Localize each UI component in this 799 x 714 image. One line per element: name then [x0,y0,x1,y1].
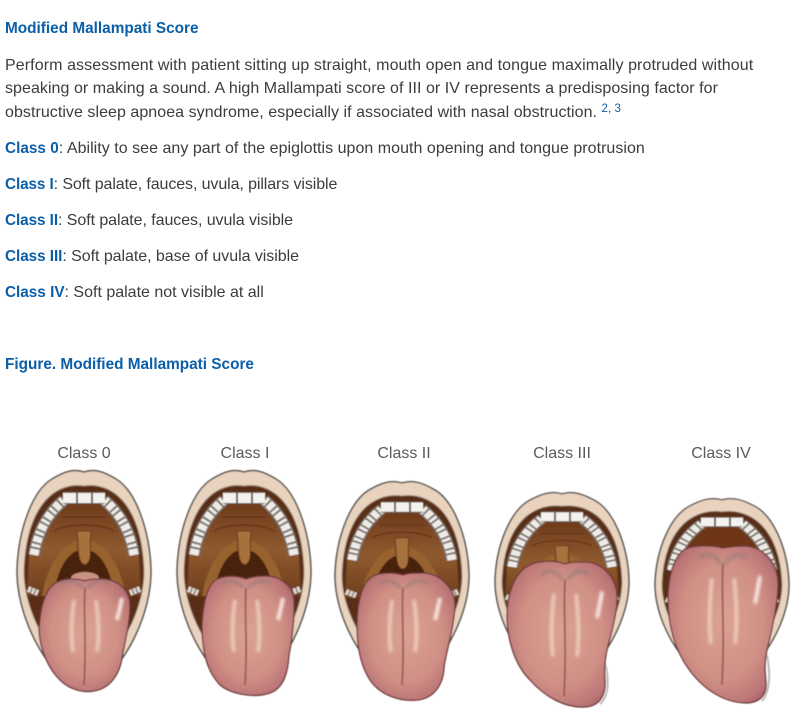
text: Class III definition: Class III: Soft palate, base of uvula visible [5,248,299,265]
heading: Modified Mallampati Score: Modified Mallampati Score [5,20,199,37]
label: Class I: Class I [221,445,269,462]
text: Class I definition: Class I: Soft palate, fauces, uvula, pillars visible [5,176,337,193]
mouth: Class 0 [17,471,151,692]
mouth: Class I [177,471,311,695]
text block: assessment instructions: Perform assessment with patient sitting up straight, mouth open and tongue maximally protruded without [5,57,753,74]
label: Class II: Class II [377,445,431,462]
mouth: Class IV [655,499,789,703]
text block: assessment instructions: speaking or making a sound. A high Mallampati score of III or IV represents a predisposing factor for [5,80,718,97]
label: Class 0: Class 0 [57,445,111,462]
mouth: Class II [335,482,469,700]
text block: assessment instructions: obstructive sleep apnoea syndrome, especially if associated with nasal obstruction. 2, 3 [5,103,621,121]
label: Class IV: Class IV [691,445,751,462]
mouth: Class III [495,493,629,707]
text: Class 0 definition: Class 0: Ability to see any part of the epiglottis upon mouth opening and tongue protrusion [5,140,645,157]
label: Class III: Class III [533,445,591,462]
text block: assessment instructions [5,57,754,121]
text: Class IV definition: Class IV: Soft palate not visible at all [5,284,264,301]
heading: figure title: Figure. Modified Mallampati Score [5,356,254,373]
text: Class II definition: Class II: Soft palate, fauces, uvula visible [5,212,293,229]
